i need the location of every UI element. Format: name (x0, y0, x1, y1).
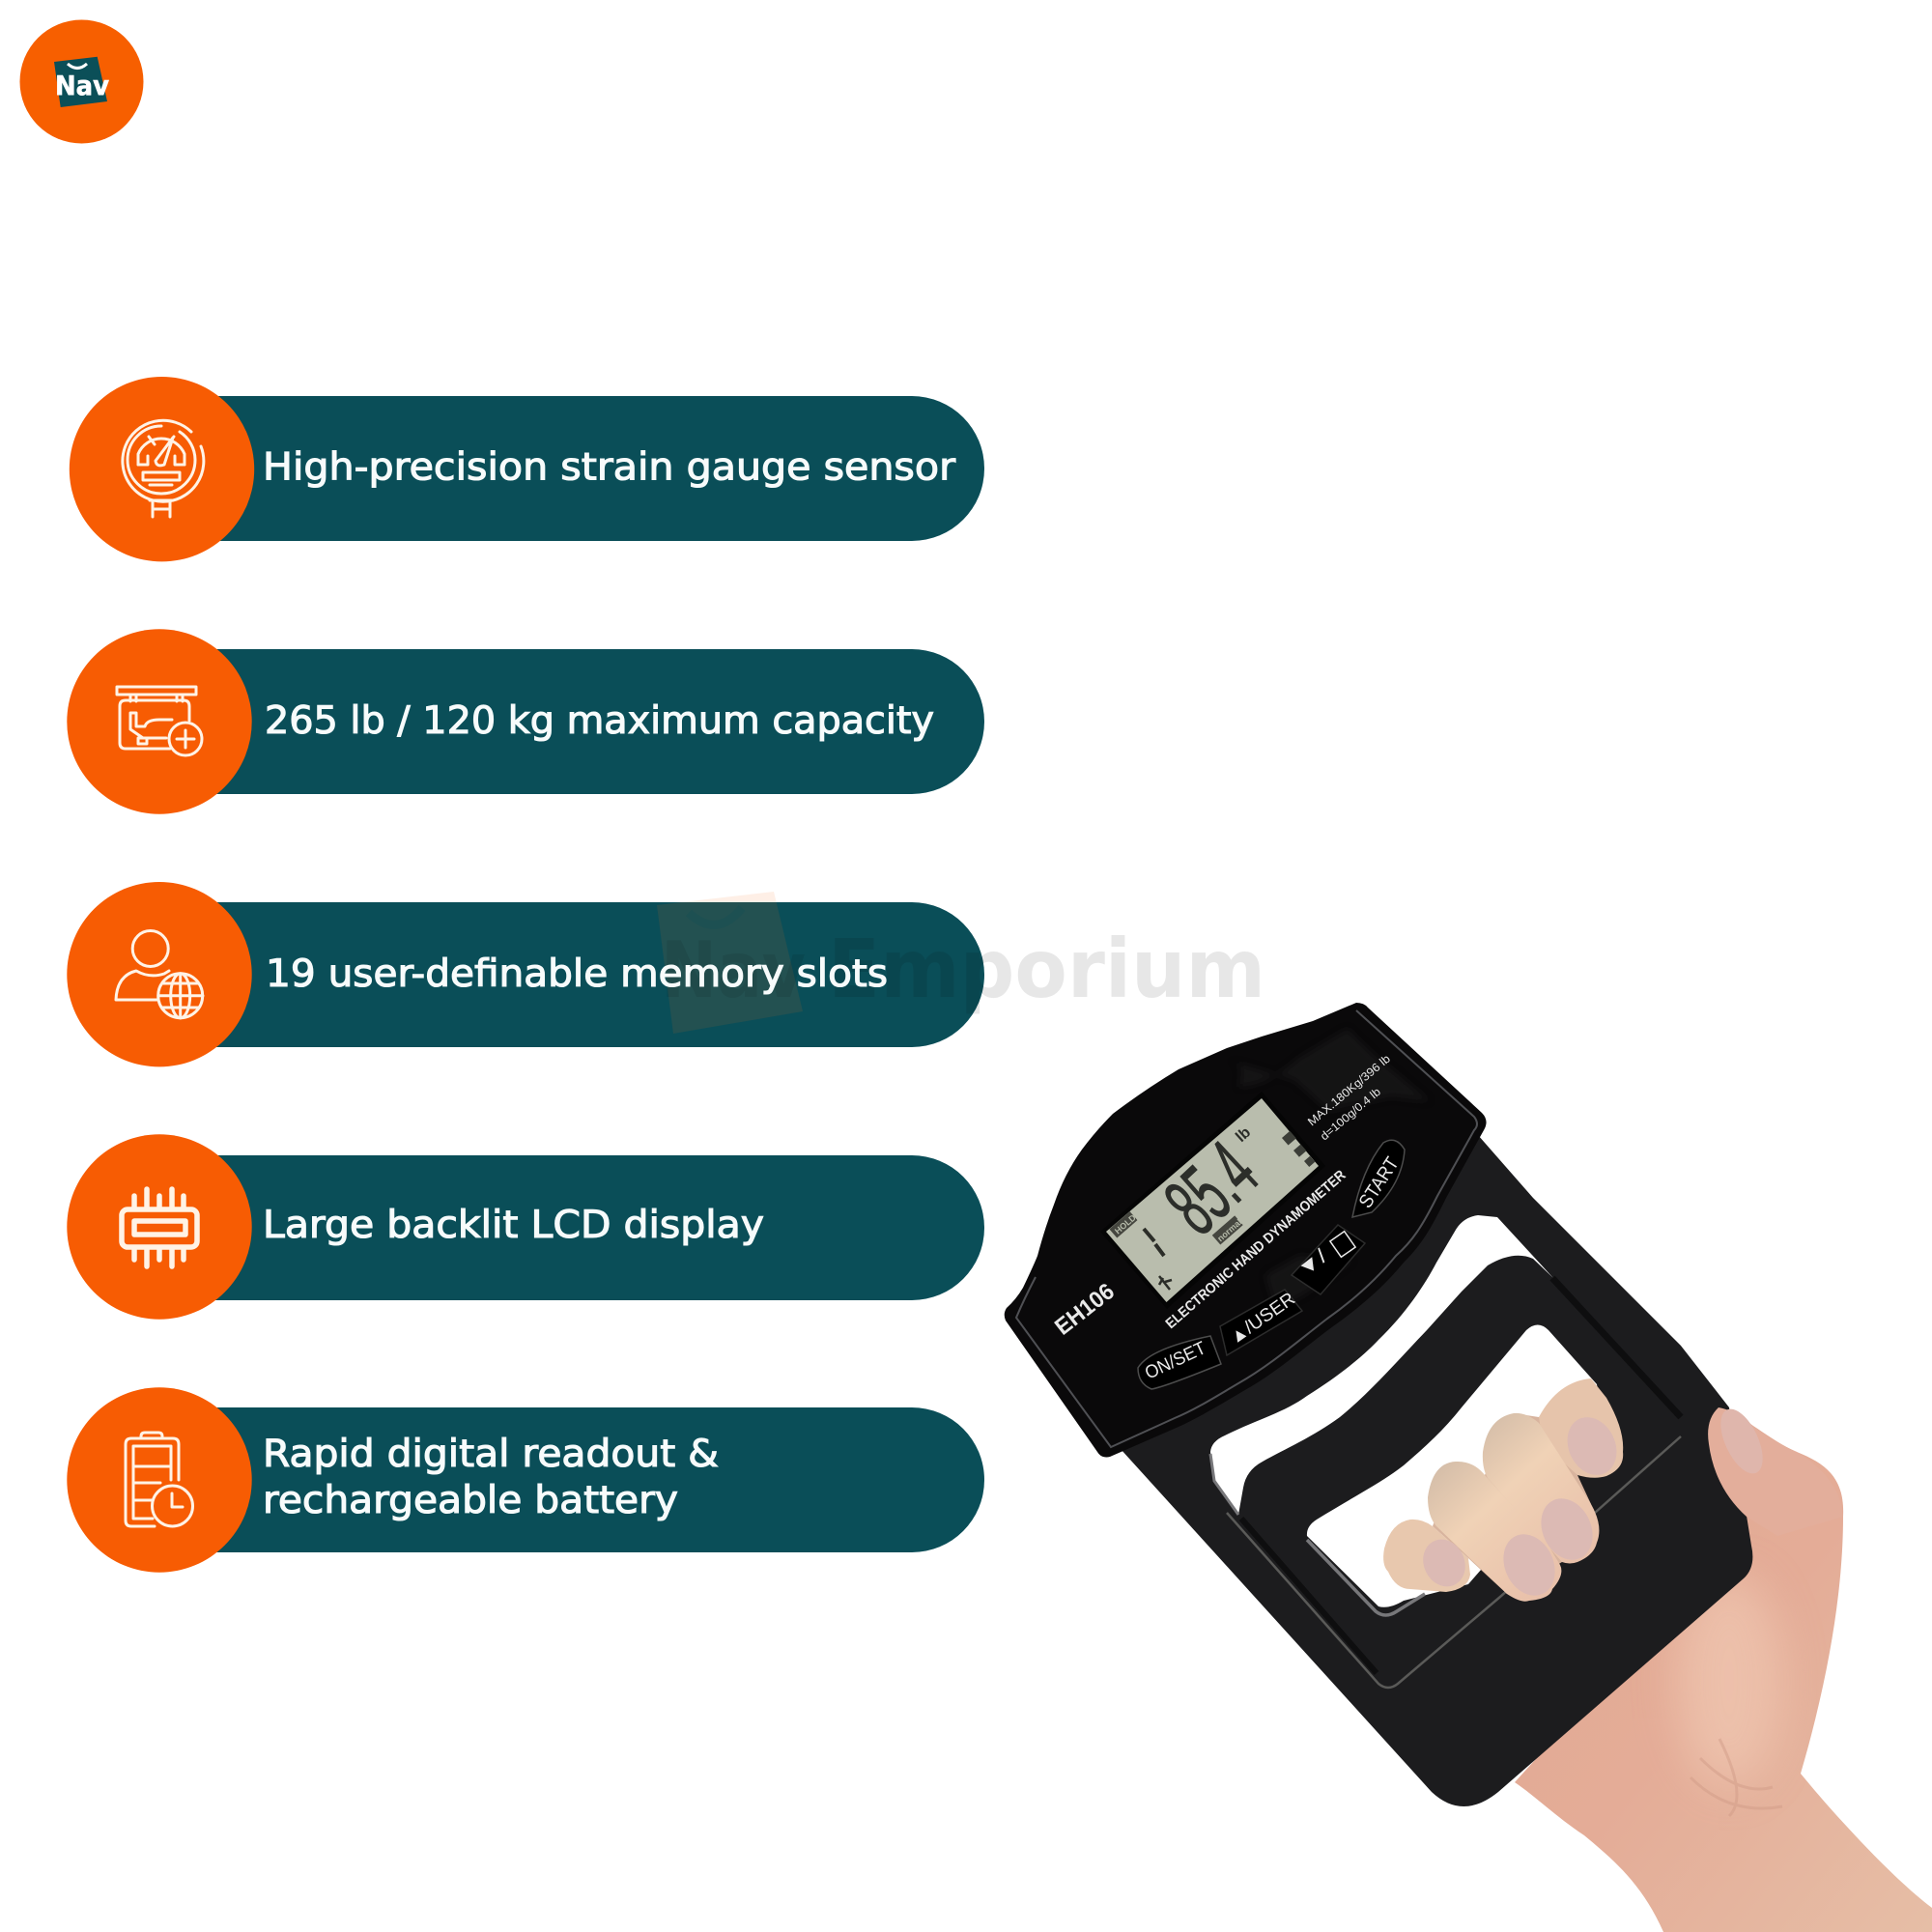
watermark: Nav Emporium: Nav (661, 925, 806, 1015)
feature text 2: 265 lb / 120 kg maximum capacity (265, 699, 934, 743)
start button: START (1355, 1153, 1404, 1212)
icon circle 3 (67, 882, 252, 1066)
watermark: Nav Emporium: Emporium (828, 922, 1265, 1016)
feature text 5: Rapid digital readout & (263, 1433, 719, 1476)
LCD normal tag: normal (1215, 1217, 1243, 1243)
product photo: hand dynamometer held in hand (1005, 1003, 1932, 1932)
hand: palm and wrist (1515, 1407, 1932, 1932)
wrist crease shading (1690, 1739, 1782, 1816)
feature text 3: 19 user-definable memory slots (266, 952, 888, 996)
finger underlay (1433, 1413, 1591, 1594)
thumb (1708, 1407, 1843, 1536)
icon circle 5 (67, 1387, 252, 1573)
feature bar 1 background (164, 396, 984, 541)
feature bar 2 background (159, 649, 984, 794)
icon: pressure gauge (123, 420, 204, 517)
feature bar 4 background (159, 1155, 984, 1300)
icon circle 1 (70, 377, 254, 561)
feature bar 5 background (159, 1407, 984, 1552)
palm tonal shading (1676, 1575, 1782, 1787)
finger 2 (1483, 1413, 1599, 1563)
on/set button: ON/SET (1142, 1338, 1209, 1384)
LCD bezel (1100, 1092, 1325, 1309)
LCD screen (1106, 1098, 1319, 1302)
feature text 4: Large backlit LCD display (263, 1204, 764, 1247)
down/book button: ▼/ (1293, 1245, 1331, 1282)
icon circle 4 (67, 1134, 252, 1320)
LCD reading: 85.4 (1147, 1123, 1274, 1252)
down/book button (1292, 1225, 1365, 1294)
glossy reflections (1229, 1029, 1430, 1309)
finger opening crescent (1210, 1215, 1553, 1515)
icon: microchip (122, 1189, 197, 1266)
thumb nail (1712, 1403, 1772, 1480)
up/user button: ▲/USER (1226, 1289, 1299, 1349)
logo badge: Nav (55, 70, 109, 101)
watermark: Nav Emporium (657, 892, 1265, 1034)
feature text 1: High-precision strain gauge sensor (263, 446, 956, 489)
feature text 5 (263, 1433, 719, 1522)
feature bar 3 background (159, 902, 984, 1047)
LCD unit: lb (1233, 1124, 1254, 1146)
finger 3 (1428, 1462, 1561, 1602)
icon: weighing scale with plus (117, 687, 202, 755)
logo badge (19, 19, 143, 143)
frame body (1121, 1135, 1752, 1806)
frame highlight lines (1227, 1278, 1681, 1688)
finger 4 (1383, 1520, 1470, 1592)
icon: user with globe (116, 931, 203, 1018)
finger 1 (1539, 1378, 1623, 1478)
finger nails (1415, 1409, 1626, 1604)
LCD battery bars (1282, 1131, 1315, 1167)
LCD memory number (1144, 1229, 1164, 1256)
capacity labels: MAX.180Kg/396 lb (1305, 1052, 1393, 1128)
feature text 5: rechargeable battery (263, 1479, 678, 1522)
icon: battery with clock (126, 1433, 193, 1526)
grip finger window (1307, 1325, 1604, 1607)
LCD person glyph (1159, 1276, 1172, 1290)
icon circle 2 (67, 629, 252, 814)
model label: EH106 (1050, 1278, 1120, 1341)
capacity labels: d=100g/0.4 lb (1318, 1085, 1383, 1143)
crescent bezel (1210, 1454, 1238, 1515)
device head bevel (1016, 1010, 1477, 1447)
device title: ELECTRONIC HAND DYNAMOMETER (1162, 1167, 1350, 1332)
LCD hold tag: HOLD (1113, 1212, 1138, 1236)
device head (1005, 1003, 1487, 1457)
